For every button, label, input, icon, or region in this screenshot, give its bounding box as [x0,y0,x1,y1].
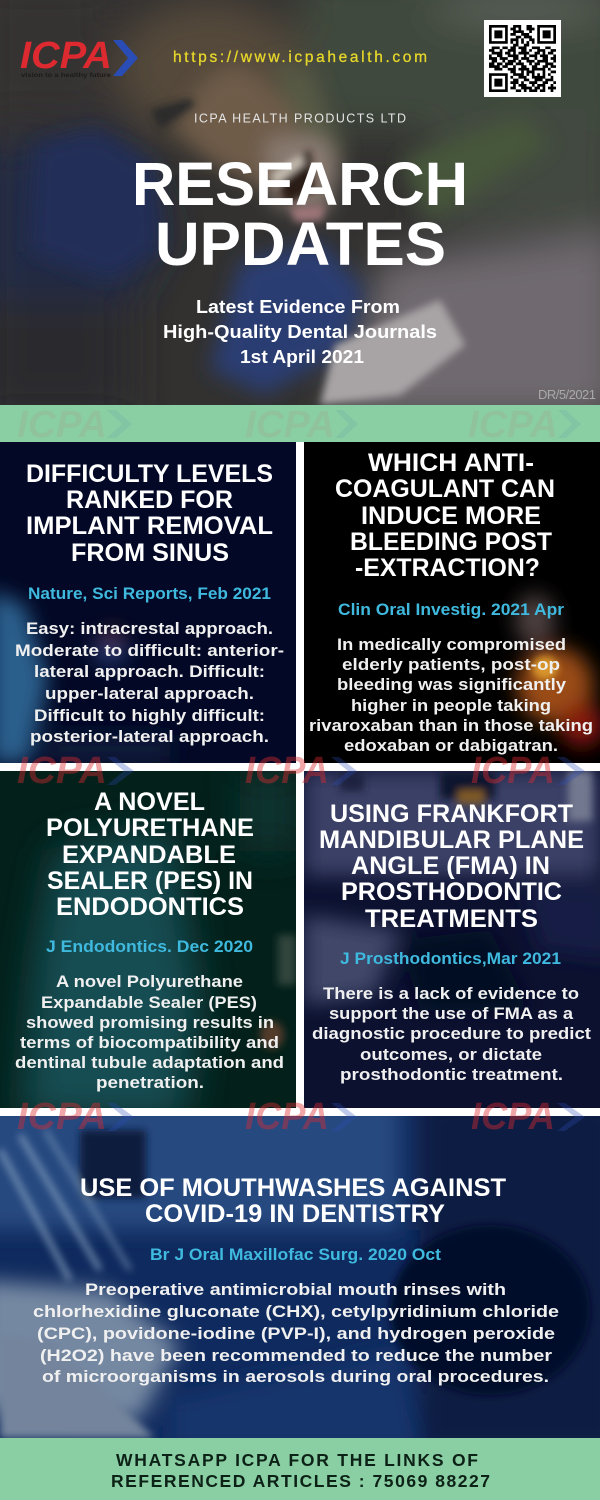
body text [309,636,593,755]
panel background photo [0,771,296,1120]
panel background photo [304,442,600,763]
panel: mouthwashes [0,1100,600,1450]
heading: USING FRANKFORT [330,800,573,828]
heading: -EXTRACTION? [355,554,540,582]
body text: prosthodontic treatment. [340,1066,563,1084]
heading: A NOVEL [94,788,205,816]
panel: hero [0,0,600,420]
body text: Difficult to highly difficult: [34,706,265,725]
footer: WHATSAPP ICPA FOR THE LINKS OF [116,1450,478,1470]
heading: DIFFICULTY LEVELS [26,460,273,488]
heading: RANKED FOR [66,486,233,514]
company name: ICPA HEALTH PRODUCTS LTD [194,112,406,126]
green band with watermarks: ICPA [17,404,107,446]
body text: showed promising results in [26,1014,274,1032]
subtitle: Latest Evidence From [196,297,400,317]
gap watermarks: ICPA [17,750,107,792]
gap watermarks: ICPA [471,1096,555,1138]
journal citation: Br J Oral Maxillofac Surg. 2020 Oct [150,1246,442,1264]
heading: USE OF MOUTHWASHES AGAINST [80,1174,506,1202]
body text: terms of biocompatibility and [20,1034,279,1052]
body text: higher in people taking [351,697,551,715]
subtitle: 1st April 2021 [240,347,364,367]
logo: ICPA: vision to a healthy future [21,72,111,79]
gap watermarks: ICPA [471,750,555,792]
document reference: DR/5/2021 [538,387,596,402]
body text: lateral approach. Difficult: [34,662,265,681]
panel background photo [0,442,296,763]
body text: Expandable Sealer (PES) [41,994,257,1012]
logo: ICPA: ICPA [20,35,112,77]
body text [312,985,592,1084]
body text: outcomes, or dictate [360,1046,542,1064]
heading: INDUCE MORE [361,502,541,530]
panel: anticoagulant [304,442,600,763]
heading [335,449,555,582]
green band with watermarks: ICPA [468,404,558,446]
body text: rivaroxaban than in those taking [309,717,593,735]
hero photo: patient at dentist [0,0,600,420]
heading: IMPLANT REMOVAL [26,512,273,540]
heading [26,460,273,567]
subtitle: High-Quality Dental Journals [163,322,437,342]
panel background photo [304,771,600,1108]
heading: COAGULANT CAN [335,475,555,503]
heading: EXPANDABLE [62,841,236,869]
panel: implant removal [0,442,296,763]
body text: bleeding was significantly [337,676,567,694]
footer [0,1438,600,1500]
panel background photo [0,1100,600,1450]
icon: QR code [484,20,561,97]
subtitle [163,297,437,367]
body text: (H2O2) have been recommended to reduce the number [40,1346,552,1365]
gap watermarks: ICPA [17,1096,107,1138]
gap watermarks: ICPA [245,1096,329,1138]
heading [319,800,584,933]
body text: of microorganisms in aerosols during oral procedures. [42,1367,549,1386]
footer: REFERENCED ARTICLES : 75069 88227 [111,1471,490,1491]
heading [46,788,254,921]
body text: upper-lateral approach. [45,684,254,703]
journal citation: Nature, Sci Reports, Feb 2021 [28,585,271,603]
body text: Easy: intracrestal approach. [26,619,273,638]
heading: TREATMENTS [365,905,538,933]
body text: There is a lack of evidence to [323,985,579,1003]
title: RESEARCH [132,150,468,218]
title [132,150,468,278]
body text: elderly patients, post-op [342,656,560,674]
body text: Preoperative antimicrobial mouth rinses with [85,1280,506,1299]
heading: SEALER (PES) IN [47,867,253,895]
panel: Frankfort mandibular plane [304,771,600,1108]
green band with watermarks [0,404,600,446]
body text: posterior-lateral approach. [30,727,269,746]
website url: https://www.icpahealth.com [173,49,427,66]
heading: ANGLE (FMA) IN [351,852,550,880]
title: UPDATES [155,210,446,278]
body text [15,619,284,746]
heading: PROSTHODONTIC [341,878,562,906]
journal citation: J Endodontics. Dec 2020 [46,938,253,956]
body text: diagnostic procedure to predict [312,1025,592,1043]
panel: polyurethane sealer [0,771,296,1120]
heading: COVID-19 IN DENTISTRY [145,1200,445,1228]
body text: edoxaban or dabigatran. [344,737,558,755]
heading: BLEEDING POST [350,528,552,556]
journal citation: J Prosthodontics,Mar 2021 [340,950,561,968]
journal citation: Clin Oral Investig. 2021 Apr [338,601,565,619]
body text [15,973,284,1092]
heading: POLYURETHANE [46,814,254,842]
heading: MANDIBULAR PLANE [319,826,584,854]
body text: In medically compromised [337,636,566,654]
body text: Moderate to difficult: anterior- [15,641,284,660]
heading [80,1174,506,1228]
heading: ENDODONTICS [56,893,244,921]
heading: WHICH ANTI- [368,449,534,477]
gap watermarks [17,750,585,1138]
body text: (CPC), povidone-iodine (PVP-I), and hydrogen peroxide [37,1324,555,1343]
green band with watermarks: ICPA [245,404,335,446]
gap watermarks: ICPA [245,750,329,792]
body text: penetration. [96,1074,204,1092]
body text [33,1280,559,1386]
body text: A novel Polyurethane [56,973,243,991]
body text: support the use of FMA as a [329,1005,574,1023]
body text: dentinal tubule adaptation and [15,1054,284,1072]
body text: chlorhexidine gluconate (CHX), cetylpyridinium chloride [33,1302,559,1321]
heading: FROM SINUS [71,539,229,567]
